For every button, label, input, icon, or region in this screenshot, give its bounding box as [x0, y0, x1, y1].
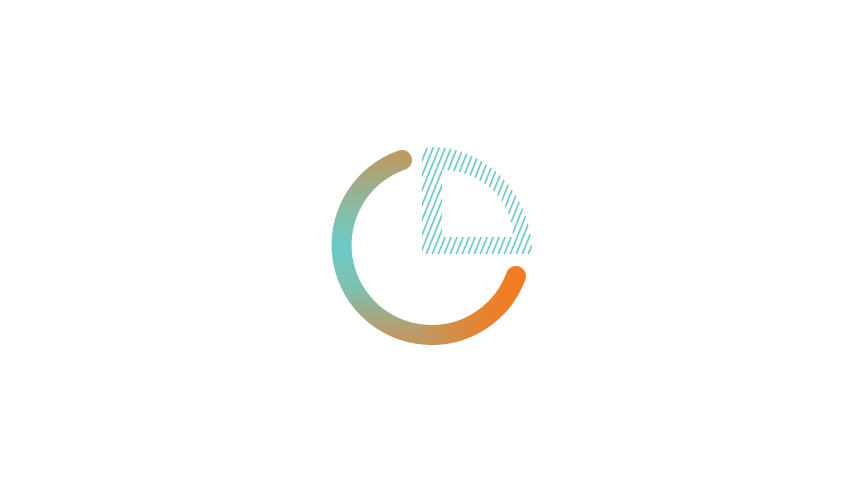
hatched quarter slice — [422, 147, 532, 254]
ring arc — [342, 160, 516, 335]
